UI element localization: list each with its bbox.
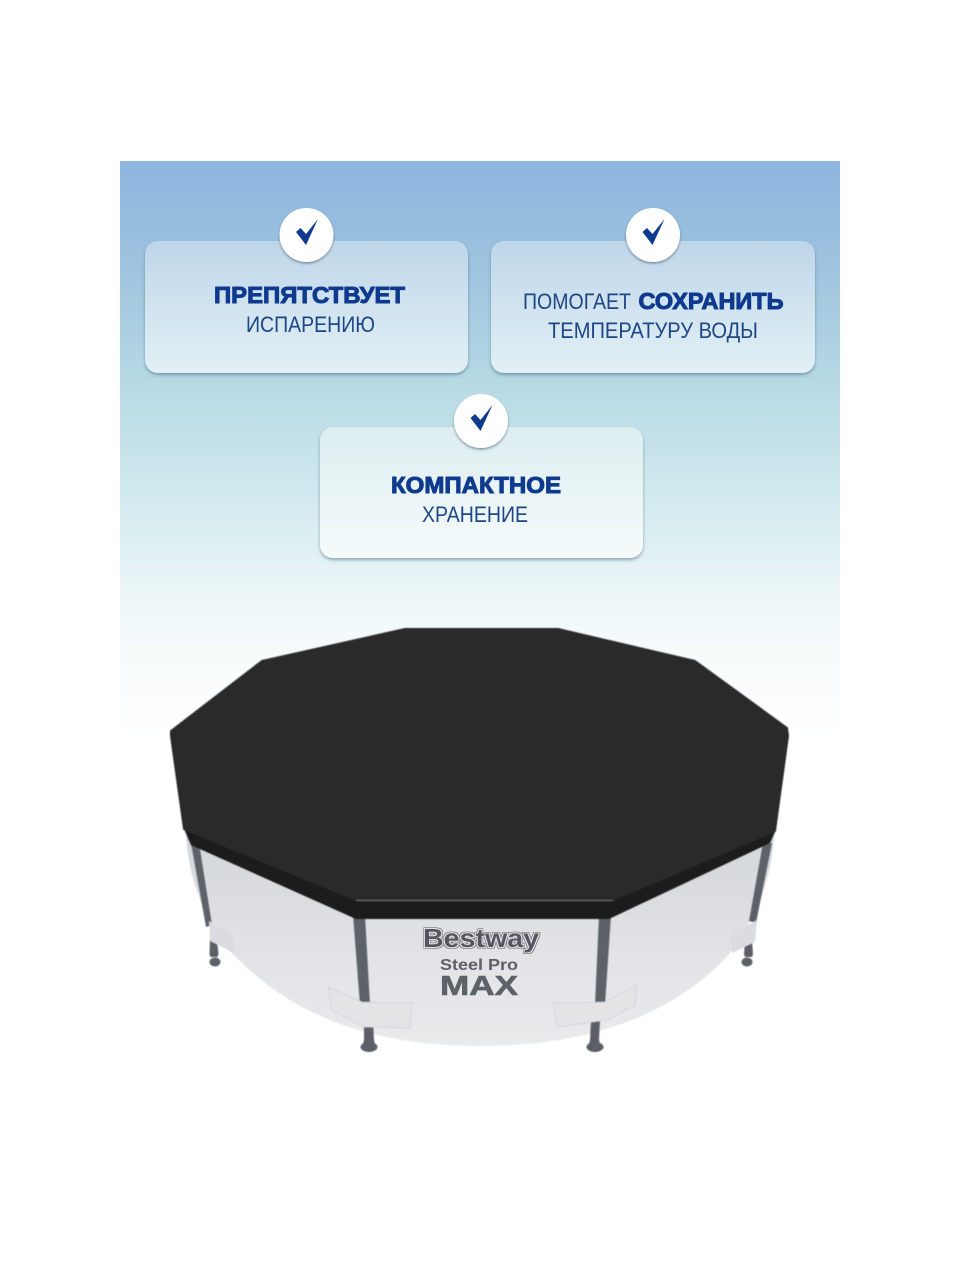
icon: check badge 3 <box>454 394 508 448</box>
text: card 1 subheading: ИСПАРЕНИЮ <box>246 312 375 337</box>
card: helps keep water temperature <box>491 208 815 373</box>
logo: Bestway: Bestway <box>423 923 540 953</box>
text: card 3 subheading: ХРАНЕНИЕ <box>422 502 528 527</box>
icon: check badge 2 <box>626 208 680 262</box>
text: card 2 second line: ТЕМПЕРАТУРУ ВОДЫ <box>548 318 758 343</box>
logo: Steel Pro: Steel Pro <box>440 957 518 974</box>
pool wall <box>186 835 774 1046</box>
pool with cover <box>171 629 788 1052</box>
text: card 2 first line: ПОМОГАЕТ <box>523 289 631 314</box>
strap: front right <box>553 985 637 1027</box>
strap: front left <box>328 987 412 1028</box>
pool legs <box>210 940 753 1052</box>
logo: MAX: MAX <box>440 970 518 1001</box>
pool frame struts <box>191 843 772 1005</box>
brand logo <box>423 923 540 1001</box>
card: prevents evaporation <box>145 208 468 373</box>
background gradient panel <box>120 161 840 736</box>
strap: right <box>730 920 757 953</box>
black cover <box>171 629 788 919</box>
text: card 3 heading: КОМПАКТНОЕ <box>391 472 561 498</box>
text: card 2 bold word: СОХРАНИТЬ <box>638 288 784 314</box>
card: compact storage <box>320 394 643 558</box>
icon: check badge 1 <box>280 208 334 262</box>
text: card 1 heading: ПРЕПЯТСТВУЕТ <box>214 282 405 308</box>
strap: left <box>209 921 234 953</box>
